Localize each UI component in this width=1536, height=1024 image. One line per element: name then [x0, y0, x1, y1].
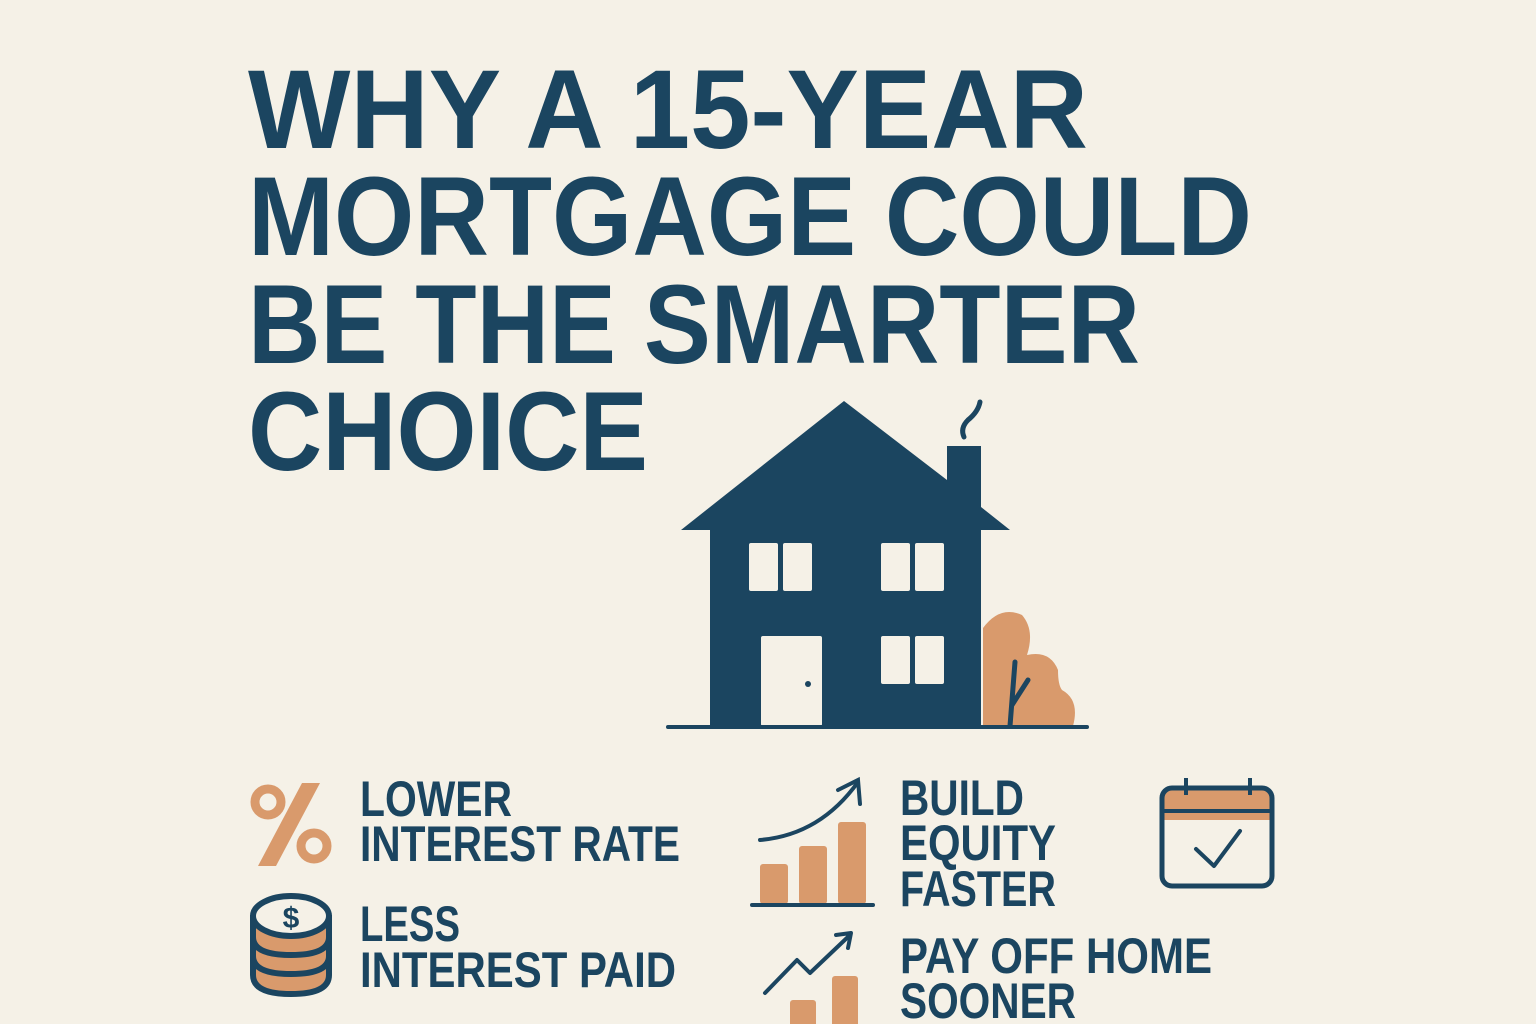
title: CHOICE	[248, 369, 648, 494]
icon: coin stack: $	[283, 902, 300, 935]
text: build equity faster	[900, 770, 1056, 917]
title: WHY A 15-YEAR	[248, 47, 1088, 172]
icon: equity bar chart	[752, 780, 873, 905]
text: build equity faster: FASTER	[900, 861, 1056, 917]
icon: coin stack	[253, 896, 329, 994]
text: pay off home sooner	[900, 928, 1212, 1024]
title: BE THE SMARTER	[248, 262, 1140, 387]
title: MORTGAGE COULD	[248, 154, 1252, 279]
title	[248, 47, 1252, 494]
text: less interest paid: INTEREST PAID	[360, 942, 676, 998]
text: build equity faster: EQUITY	[900, 815, 1056, 871]
text: build equity faster: BUILD	[900, 770, 1024, 826]
icon: growth chart	[765, 933, 858, 1024]
text: lower interest rate: LOWER	[360, 771, 512, 827]
text: lower interest rate	[360, 771, 680, 872]
bush	[983, 612, 1075, 726]
text: pay off home sooner: PAY OFF HOME	[900, 928, 1212, 984]
text: less interest paid: LESS	[360, 896, 460, 952]
icon: percent	[255, 783, 327, 866]
icon: calendar	[1162, 778, 1272, 886]
text: lower interest rate: INTEREST RATE	[360, 816, 680, 872]
house illustration	[668, 401, 1087, 727]
text: less interest paid	[360, 896, 676, 998]
